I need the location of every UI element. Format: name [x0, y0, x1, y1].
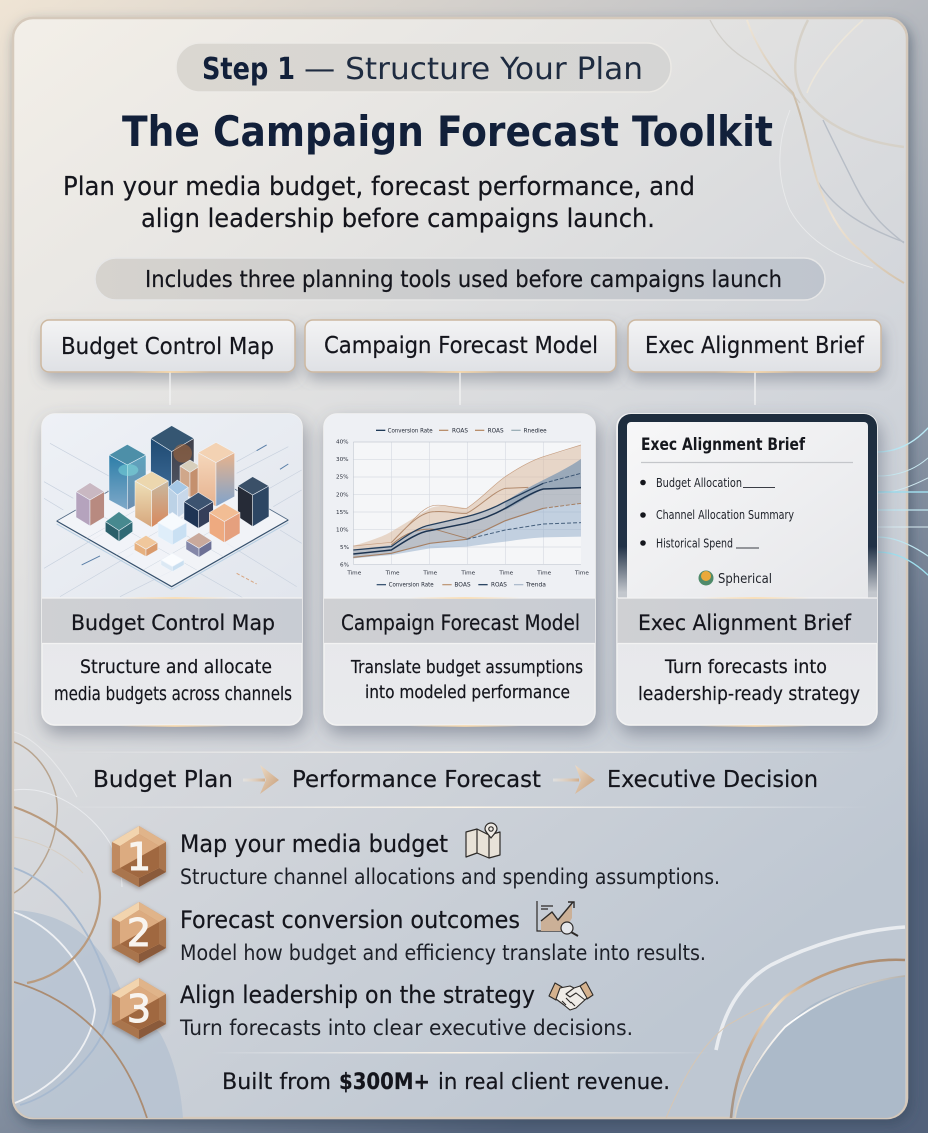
small tan block	[180, 460, 200, 472]
tall peach block	[198, 442, 235, 463]
mauve block	[76, 483, 104, 500]
chart axis labels: 20%	[336, 492, 349, 498]
logo: Spherical: Spherical	[718, 572, 772, 587]
step pill: Step 1	[202, 52, 295, 87]
card: Exec Alignment Brief: Turn forecasts into	[664, 656, 827, 678]
includes pill	[95, 258, 825, 300]
card: Budget Control Map	[42, 414, 302, 725]
step pill	[176, 43, 671, 92]
tool label: Exec Alignment Brief: Exec Alignment Brief	[645, 333, 865, 359]
card: Budget Control Map: Structure and allocate	[80, 656, 272, 678]
chart axis labels: Time	[460, 570, 476, 576]
step 1: Structure channel allocations and spending assumptions.	[180, 865, 720, 889]
chart axis labels: 15%	[336, 510, 349, 516]
arrow	[243, 765, 279, 794]
chart legend bottom: ROAS	[491, 582, 507, 589]
step 3: Align leadership on the strategy	[180, 981, 535, 1009]
card: Campaign Forecast Model: into modeled performance	[365, 682, 570, 703]
chart legend bottom: Trenda	[525, 582, 546, 589]
card: Campaign Forecast Model: Campaign Forecast Model	[341, 611, 580, 635]
step 1	[112, 823, 720, 889]
card: Budget Control Map: media budgets across channels	[54, 683, 292, 705]
card: Exec Alignment Brief	[617, 414, 877, 725]
card: Campaign Forecast Model	[324, 414, 595, 725]
chart axis labels	[336, 440, 589, 576]
chart axis labels: 25%	[336, 475, 349, 481]
step 2: Forecast conversion outcomes	[180, 906, 520, 934]
brief document: Exec Alignment Brief	[641, 435, 805, 455]
chart axis labels: Time	[498, 570, 514, 576]
chart legend top: ROAS	[452, 427, 468, 434]
icon: hexagon badge 3: 3	[127, 987, 151, 1031]
subtitle: Plan your media budget, forecast performance, and	[63, 172, 695, 202]
chart axis labels: 30%	[336, 457, 349, 463]
card: Exec Alignment Brief: Exec Alignment Brief	[638, 611, 852, 635]
chart axis labels: 5%	[340, 545, 350, 551]
chart axis labels: 10%	[336, 528, 349, 534]
white block	[158, 512, 187, 531]
step 2	[112, 901, 706, 965]
footer statement	[222, 1070, 670, 1095]
chart legend top: Conversion Rate	[388, 427, 433, 434]
step pill: — Structure Your Plan	[304, 52, 643, 87]
subtitle: align leadership before campaigns launch.	[141, 204, 655, 234]
arrow	[553, 765, 595, 794]
tool label: Budget Control Map	[41, 320, 295, 372]
tall teal block	[109, 444, 146, 465]
icon: hexagon badge 1: 1	[127, 835, 151, 879]
chart axis labels: Time	[422, 570, 438, 576]
card: Budget Control Map: Budget Control Map	[71, 611, 275, 635]
beige forecast band	[353, 445, 581, 558]
icon: hexagon badge 1	[112, 826, 166, 887]
yellow block	[135, 472, 168, 491]
step 2: Model how budget and efficiency translate into results.	[180, 941, 706, 965]
light blue block	[168, 480, 188, 495]
tool label: Campaign Forecast Model	[305, 320, 616, 372]
step 3: Turn forecasts into clear executive decisions.	[179, 1016, 633, 1040]
blue forecast band	[353, 459, 581, 558]
icon: map with pin	[466, 823, 500, 858]
chart axis labels: 6%	[340, 563, 350, 569]
glowing data lines at right edge	[877, 428, 928, 575]
includes pill: Includes three planning tools used before campaigns launch	[145, 267, 782, 293]
logo: Spherical	[698, 570, 772, 587]
step 3	[112, 978, 633, 1040]
chart legend top	[376, 427, 547, 434]
brief document: Budget Allocation	[656, 475, 742, 490]
chart legend top: ROAS	[488, 427, 504, 434]
process flow	[93, 765, 818, 794]
chart legend bottom: BOAS	[454, 582, 471, 589]
footer statement: $300M+	[339, 1070, 430, 1095]
icon: handshake	[549, 982, 593, 1010]
tool label: Campaign Forecast Model: Campaign Forecast Model	[324, 333, 598, 359]
chart axis labels: Time	[346, 570, 362, 576]
teal block	[105, 512, 133, 531]
tall navy block	[151, 426, 194, 452]
brief document: Historical Spend	[656, 536, 733, 550]
small orange block	[134, 535, 158, 549]
orange block	[209, 503, 240, 522]
process flow: Performance Forecast	[292, 767, 541, 793]
illustration: isometric budget blocks	[44, 426, 302, 600]
footer statement: in real client revenue.	[438, 1070, 670, 1095]
brief document	[627, 422, 868, 598]
chart axis labels: 40%	[336, 440, 349, 446]
tool label: Budget Control Map: Budget Control Map	[61, 334, 274, 360]
icon: hexagon badge 3	[112, 978, 166, 1039]
icon: hexagon badge 2	[112, 902, 166, 963]
dark block centre	[184, 492, 213, 511]
chart legend top: Rnediee	[524, 427, 547, 434]
line chart	[336, 427, 589, 589]
footer statement: Built from	[222, 1070, 331, 1095]
small mauve block	[186, 533, 212, 548]
brief document: Channel Allocation Summary	[656, 507, 794, 522]
small white block	[161, 553, 184, 567]
subtitle	[63, 172, 695, 234]
card: Exec Alignment Brief: leadership-ready strategy	[638, 683, 860, 705]
process flow: Budget Plan	[93, 767, 233, 793]
title: The Campaign Forecast Toolkit	[122, 107, 773, 156]
chart axis labels: Time	[574, 570, 589, 576]
card: Campaign Forecast Model: Translate budget assumptions	[350, 657, 583, 678]
chart legend bottom	[377, 582, 546, 589]
process flow: Executive Decision	[607, 767, 818, 793]
step 1: Map your media budget	[180, 830, 448, 858]
dark block right	[238, 477, 269, 495]
chart legend bottom: Conversion Rate	[389, 582, 434, 589]
icon: chart with magnifier	[537, 901, 578, 936]
chart axis labels: Time	[385, 570, 400, 576]
chart axis labels: Time	[536, 570, 552, 576]
tool label: Exec Alignment Brief	[628, 320, 881, 372]
icon: hexagon badge 2: 2	[127, 911, 151, 955]
